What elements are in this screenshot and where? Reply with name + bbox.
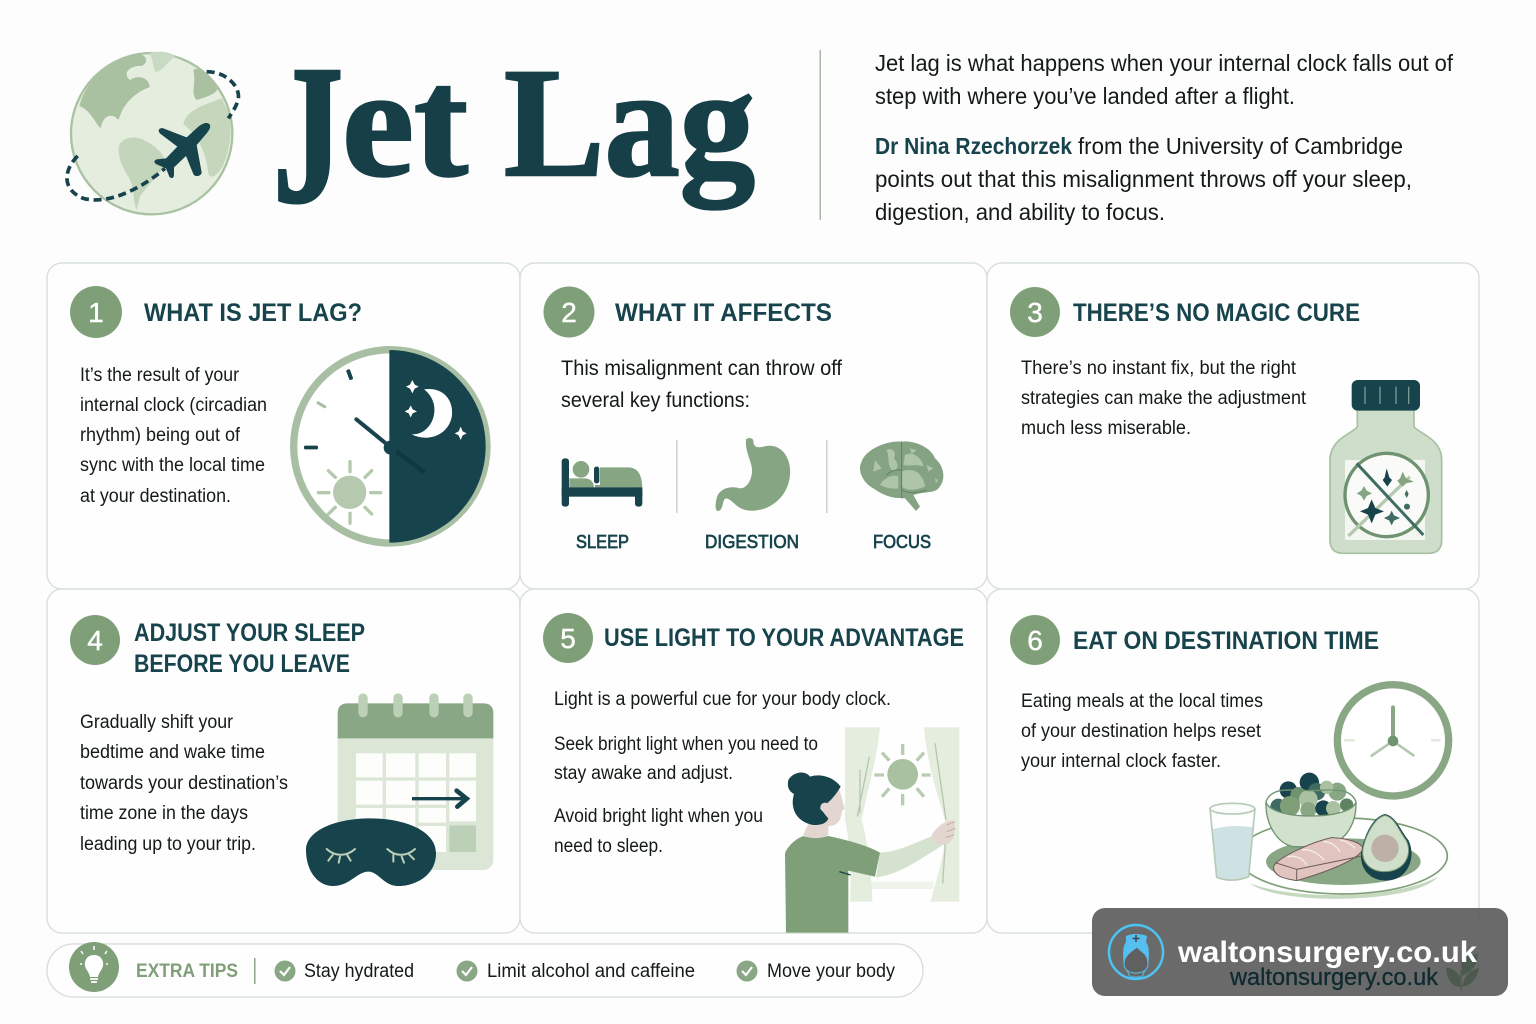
glass of water [1210, 803, 1255, 880]
body text 6 [1021, 691, 1263, 772]
body text 5: Avoid bright light when you [554, 806, 763, 827]
body text 3: strategies can make the adjustment [1021, 388, 1307, 409]
key functions icons [562, 438, 943, 511]
avocado [1361, 814, 1412, 881]
label: digestion: DIGESTION [705, 532, 799, 552]
watermark badge [1092, 908, 1508, 996]
title [273, 26, 755, 245]
body text 4: leading up to your trip. [80, 834, 256, 855]
intro text: step with where you’ve landed after a flight. [875, 83, 1295, 109]
number badge 3: 3 [1027, 297, 1043, 328]
label: sleep: SLEEP [576, 532, 629, 552]
panel 6: eat on destination time [987, 589, 1479, 933]
number badge 5 [543, 613, 593, 663]
body text 1 [80, 365, 267, 507]
body text 2 [561, 357, 842, 412]
panel 4: adjust your sleep [47, 589, 520, 933]
body text 4: time zone in the days [80, 803, 248, 824]
body text 3: There’s no instant fix, but the right [1021, 358, 1297, 379]
tip: stay hydrated: Stay hydrated [304, 961, 414, 982]
body text 1: internal clock (circadian [80, 395, 267, 416]
intro text: Dr Nina Rzechorzek [875, 133, 1072, 159]
intro text [875, 50, 1454, 225]
body text 6: Eating meals at the local times [1021, 691, 1263, 712]
extra tips bar [47, 942, 923, 997]
divider: header [820, 50, 821, 220]
intro text: points out that this misalignment throws off your sleep, [875, 166, 1412, 192]
number badge 1: 1 [88, 297, 104, 328]
body text 2: This misalignment can throw off [561, 357, 842, 380]
heading 4 [134, 619, 365, 678]
salmon fillet [1273, 838, 1363, 881]
number badge 4: 4 [87, 625, 103, 656]
bowl of greens [1266, 773, 1356, 847]
intro text: digestion, and ability to focus. [875, 199, 1165, 225]
panel 5: use light [520, 589, 987, 933]
icon: brain [860, 441, 943, 511]
icon: nurse logo [1109, 925, 1163, 979]
body text 2: several key functions: [561, 389, 750, 412]
title: Lag [504, 36, 755, 210]
icon: crossed-out remedy bottle [1330, 380, 1442, 553]
dividers: icon separators [676, 440, 828, 513]
illustration: clock, meal and water [1210, 685, 1449, 899]
panel 2: what it affects [520, 263, 987, 589]
icon: stomach [716, 438, 790, 511]
watermark text: dark: waltonsurgery.co.uk [1229, 964, 1439, 991]
icon: bed [562, 458, 642, 507]
body text 5 [554, 689, 891, 857]
label: extra tips: EXTRA TIPS [136, 961, 238, 982]
heading 1: WHAT IS JET LAG? [144, 299, 362, 327]
body text 4: Gradually shift your [80, 712, 234, 733]
watermark text: white: waltonsurgery.co.uk [1177, 936, 1477, 969]
heading 5: USE LIGHT TO YOUR ADVANTAGE [604, 624, 964, 652]
number badge 3 [1010, 287, 1060, 337]
title: et [342, 36, 468, 209]
heading 2: WHAT IT AFFECTS [615, 299, 832, 327]
number badge 6: 6 [1027, 625, 1043, 656]
tip: limit alcohol and caffeine: Limit alcohol and caffeine [487, 961, 695, 982]
heading 6: EAT ON DESTINATION TIME [1073, 627, 1379, 655]
body text 5: stay awake and adjust. [554, 763, 733, 784]
heading 4: ADJUST YOUR SLEEP [134, 619, 365, 647]
icon: globe with plane and dashed flight path [67, 52, 238, 214]
plate [1238, 818, 1447, 899]
illustration: person opening curtains to the sun [785, 727, 959, 933]
panel 1: what is jet lag [47, 263, 520, 589]
label: focus: FOCUS [873, 532, 931, 552]
icon: light bulb [69, 942, 119, 992]
number badge 1 [70, 286, 122, 338]
title: J [273, 26, 343, 245]
intro text: from the University of Cambridge [1078, 133, 1403, 159]
number badge 4 [70, 615, 120, 665]
body text 1: sync with the local time [80, 455, 265, 476]
body text 5: Seek bright light when you need to [554, 734, 818, 755]
heading 3: THERE’S NO MAGIC CURE [1073, 299, 1360, 327]
icon: leaf [1446, 952, 1479, 990]
body text 5: need to sleep. [554, 836, 663, 857]
body text 5: Light is a powerful cue for your body clock. [554, 689, 891, 710]
icon: calendar with sleep mask [306, 693, 493, 886]
body text 6: your internal clock faster. [1021, 751, 1221, 772]
number badge 6 [1010, 615, 1060, 665]
body text 3 [1021, 358, 1307, 439]
body text 4 [80, 712, 288, 855]
body text 1: rhythm) being out of [80, 425, 241, 446]
number badge 5: 5 [560, 623, 576, 654]
icon: day and night clock [294, 350, 487, 543]
heading 4: BEFORE YOU LEAVE [134, 650, 350, 678]
body text 4: towards your destination’s [80, 773, 288, 794]
panel 3: no magic cure [987, 263, 1479, 589]
intro text: Jet lag is what happens when your internal clock falls out of [875, 50, 1454, 76]
body text 1: It’s the result of your [80, 365, 240, 386]
divider: tips [254, 958, 256, 984]
body text 1: at your destination. [80, 486, 231, 507]
body text 4: bedtime and wake time [80, 742, 265, 763]
body text 6: of your destination helps reset [1021, 721, 1262, 742]
clock [1337, 685, 1449, 796]
tip: move your body: Move your body [767, 961, 895, 982]
number badge 2 [544, 286, 594, 338]
body text 3: much less miserable. [1021, 418, 1191, 439]
number badge 2: 2 [561, 297, 577, 328]
